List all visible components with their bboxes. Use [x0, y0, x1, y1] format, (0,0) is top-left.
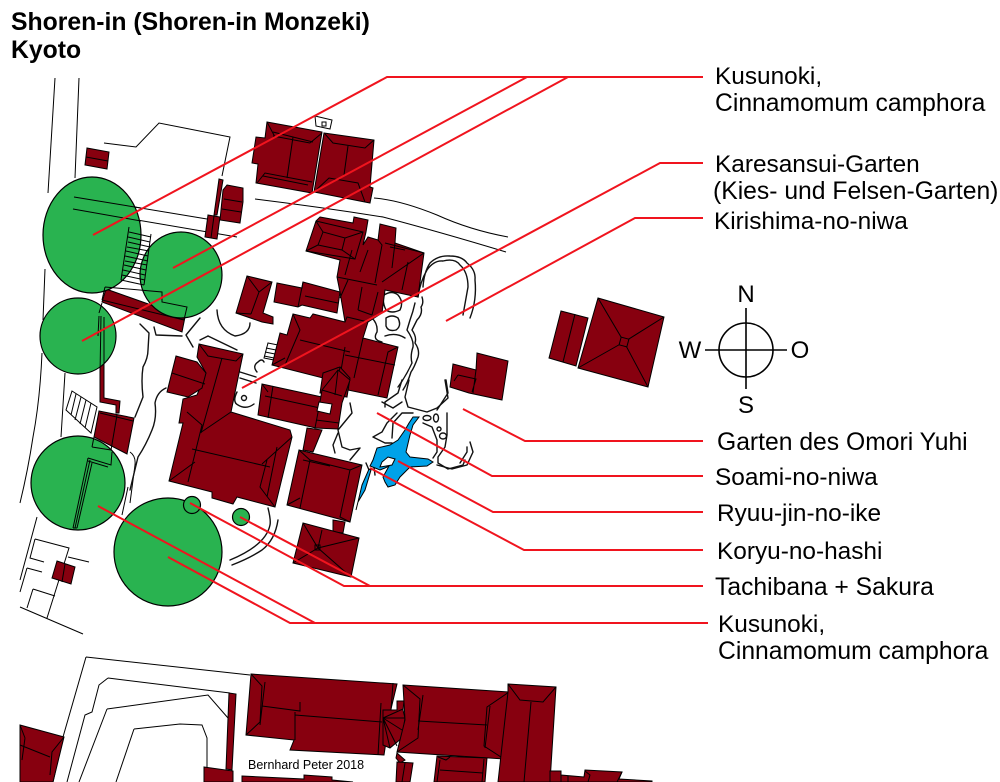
tree: sakura [232, 508, 250, 526]
pond: Ryuu-jin-no-ike [356, 417, 433, 510]
tree: camphor by gate [40, 298, 116, 374]
label: Karesansui-Garten: (Kies- und Felsen-Garten) [713, 178, 998, 205]
label: Kusunoki south: Kusunoki, [718, 611, 825, 638]
compass rose: S [738, 392, 754, 419]
tree: camphor south-west [31, 436, 125, 530]
title: Shoren-in (Shoren-in Monzeki) [11, 9, 370, 36]
leader: Soami [377, 413, 703, 476]
buildings: north group [85, 116, 374, 239]
buildings: east temple hall [549, 298, 664, 387]
tree: camphor centre [140, 232, 222, 318]
label: Tachibana + Sakura: Tachibana + Sakura [715, 574, 934, 601]
label: Garten des Omori Yuhi: Garten des Omori Yuhi [717, 429, 968, 456]
compass rose: O [791, 337, 809, 364]
label: Karesansui-Garten: Karesansui-Garten [715, 151, 920, 178]
label: Kusunoki north: Cinnamomum camphora [715, 90, 986, 117]
label: Koryu-no-hashi: Koryu-no-hashi [717, 538, 882, 565]
credit: Bernhard Peter 2018 [248, 758, 364, 772]
compass rose [679, 281, 809, 419]
roads and paths [20, 78, 508, 782]
title: Kyoto [11, 37, 81, 64]
label: Ryuu-jin-no-ike: Ryuu-jin-no-ike [717, 500, 881, 527]
compass rose: W [679, 337, 702, 364]
compass rose: N [737, 281, 755, 308]
label: Soami-no-niwa: Soami-no-niwa [715, 464, 878, 491]
leader lines [82, 77, 708, 623]
leader: Kirishima [446, 218, 703, 321]
labels [713, 63, 998, 665]
overlays above trees [66, 197, 187, 528]
tree: large camphor north-west [43, 177, 141, 293]
leader: Tachibana + Sakura [190, 503, 703, 586]
buildings: central complex [167, 217, 508, 577]
bottom building group [20, 674, 652, 782]
leader: Kusunoki north [93, 77, 703, 235]
leader: Ryuu-jin [398, 461, 703, 512]
leader: Koryu [370, 468, 703, 550]
tree: tachibana [184, 496, 200, 514]
leader: Omori Yuhi [463, 409, 703, 441]
label: Kusunoki south: Cinnamomum camphora [718, 638, 989, 665]
label: Kusunoki north: Kusunoki, [715, 63, 822, 90]
leader: Kusunoki south [98, 506, 708, 623]
buildings: west gate row [52, 289, 185, 584]
tree: camphor south [114, 498, 222, 606]
title [11, 9, 370, 64]
leader: Karesansui [242, 163, 703, 388]
label: Kirishima-no-niwa: Kirishima-no-niwa [714, 208, 908, 235]
